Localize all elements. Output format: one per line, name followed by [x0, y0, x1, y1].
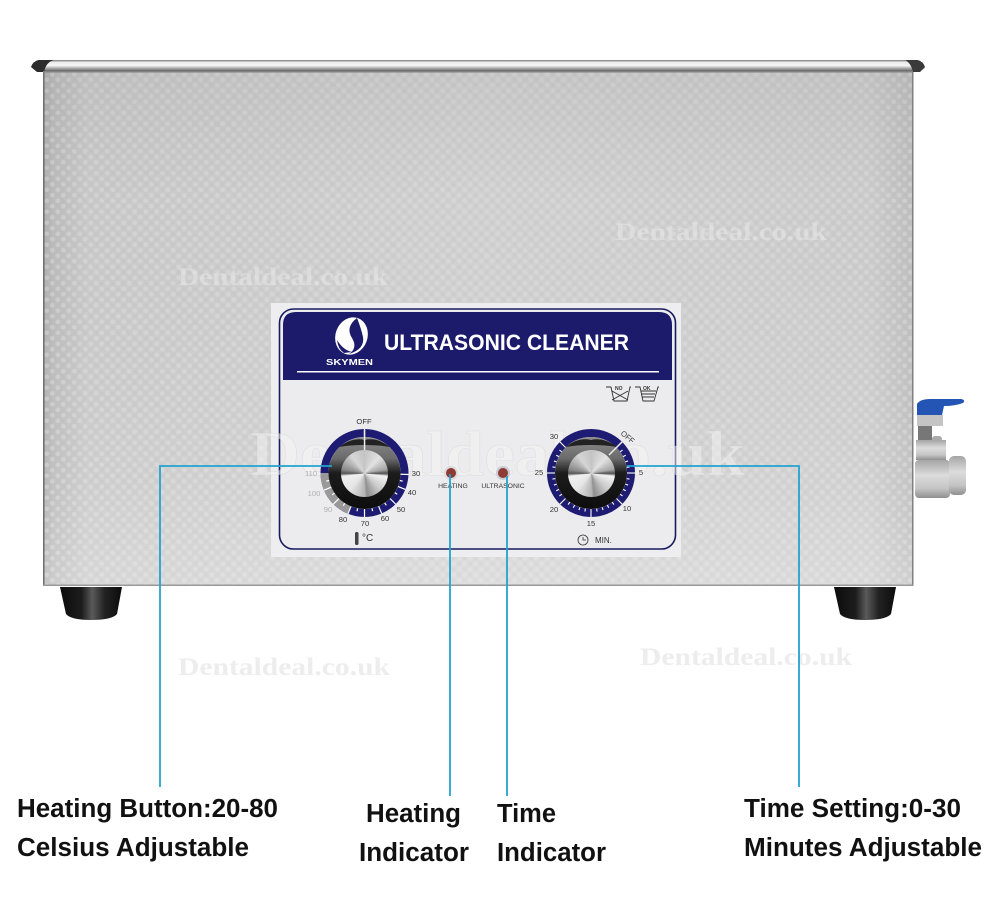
dial scale ring — [324, 429, 408, 517]
knob cap — [568, 450, 614, 496]
time scale labels: 20 — [550, 505, 558, 514]
watermark: upper left: Dentaldeal.co.uk — [178, 264, 388, 291]
temperature scale labels: OFF — [356, 417, 372, 426]
watermark: lower left: Dentaldeal.co.uk — [178, 654, 390, 681]
temperature scale labels — [305, 417, 420, 528]
icon: ok basin: OK — [643, 386, 651, 392]
indicator: heating — [438, 466, 468, 490]
label: heating indicator: Indicator — [359, 839, 469, 867]
label: time setting — [744, 795, 982, 862]
time scale labels: 30 — [550, 432, 558, 441]
temperature scale labels: 80 — [339, 515, 347, 524]
foot: left — [60, 587, 122, 620]
time scale labels: OFF — [619, 429, 637, 446]
callout line: time setting — [627, 466, 799, 787]
time scale labels: 10 — [623, 504, 631, 513]
time scale labels: 5 — [639, 468, 643, 477]
logo: SKYMEN — [326, 358, 373, 367]
panel outline — [280, 309, 676, 549]
label: heating indicator — [359, 800, 469, 867]
temperature scale labels: 90 — [324, 505, 332, 514]
temperature scale labels: 40 — [408, 488, 416, 497]
label: time setting: Time Setting:0-30 — [744, 795, 961, 823]
icon: not ok basin — [606, 386, 631, 401]
temperature scale labels: 50 — [397, 505, 405, 514]
foot: right — [834, 587, 896, 620]
minutes label: MIN. — [595, 536, 612, 545]
label: heating indicator: Heating — [366, 800, 461, 828]
panel title: ULTRASONIC CLEANER — [384, 330, 629, 355]
indicator: ultrasonic: ULTRASONIC — [481, 483, 525, 490]
tank body — [43, 71, 914, 586]
label: time indicator: Indicator — [497, 839, 606, 867]
label: time indicator: Time — [497, 800, 556, 828]
temperature scale labels: 30 — [412, 469, 420, 478]
icon: not ok basin: NO — [615, 386, 623, 392]
time scale labels — [535, 429, 643, 528]
icon: thermometer — [355, 532, 358, 545]
label: time indicator — [497, 800, 606, 867]
drain valve — [915, 399, 966, 498]
temperature scale labels: 100 — [308, 489, 320, 498]
panel header — [283, 312, 672, 380]
watermark: centre: Dentaldeal.co.uk — [250, 418, 745, 489]
knob cap — [341, 450, 388, 496]
right dial: time — [535, 429, 643, 545]
callout line: heating button — [160, 466, 332, 787]
logo — [326, 313, 373, 367]
celsius label: °C — [362, 533, 373, 544]
label: heating button: Celsius Adjustable — [17, 834, 249, 862]
label: time setting: Minutes Adjustable — [744, 834, 982, 862]
watermark: upper right: Dentaldeal.co.uk — [615, 219, 827, 246]
watermark: lower right: Dentaldeal.co.uk — [640, 644, 852, 671]
temperature scale labels: 110 — [305, 469, 317, 478]
tank rim — [31, 60, 925, 72]
time scale labels: 25 — [535, 468, 543, 477]
callout line: time indicator — [506, 476, 508, 796]
temperature scale labels: 60 — [381, 514, 389, 523]
indicator: heating: HEATING — [438, 483, 468, 490]
knob — [328, 437, 400, 509]
label: heating button: Heating Button:20-80 — [17, 795, 278, 823]
panel plate — [271, 303, 681, 557]
temperature scale labels: 70 — [361, 519, 369, 528]
icon: ok basin — [635, 386, 659, 401]
control panel — [250, 303, 745, 557]
callout line: heating indicator — [449, 474, 451, 796]
knob — [555, 437, 627, 509]
time scale labels: 15 — [587, 519, 595, 528]
dial scale ring — [547, 433, 635, 517]
left dial: temperature — [305, 417, 420, 545]
label: heating button — [17, 795, 278, 862]
icon: clock — [578, 535, 588, 545]
indicator: ultrasonic — [481, 466, 525, 490]
